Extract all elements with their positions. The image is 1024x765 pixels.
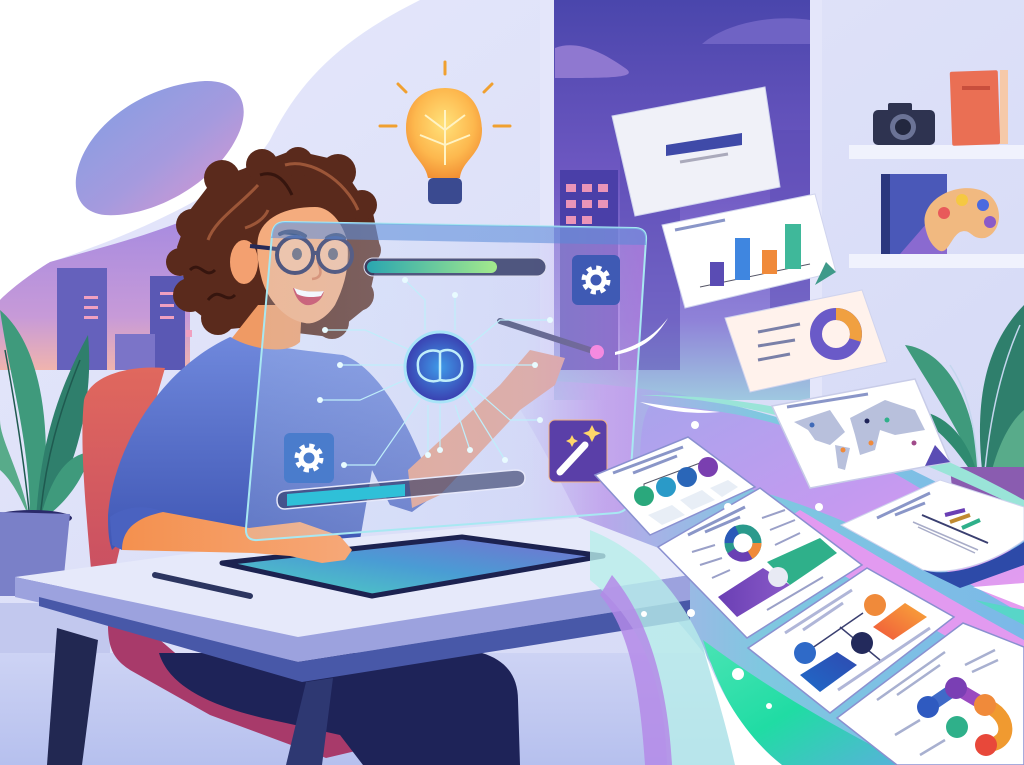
person <box>108 147 590 765</box>
card: title slide <box>612 87 780 216</box>
ear <box>230 240 258 284</box>
glasses <box>250 237 352 273</box>
desk <box>15 518 690 765</box>
bottom progress bar <box>277 470 525 509</box>
icon: magic wand <box>549 420 607 482</box>
card: process path <box>837 623 1024 765</box>
card: bar chart <box>662 194 836 308</box>
icon: palette <box>925 188 999 251</box>
face <box>257 207 348 323</box>
neural circuit lines <box>320 280 550 465</box>
card: world map <box>772 379 950 488</box>
nose <box>312 262 320 279</box>
left city skyline <box>0 218 192 370</box>
eyes <box>292 248 338 260</box>
circuit nodes <box>317 277 553 468</box>
shelves with camera, book, palette <box>849 70 1024 268</box>
forearm with pen <box>408 350 565 508</box>
card: flow diagram <box>595 437 755 535</box>
icon: camera <box>873 103 935 145</box>
window with city view <box>540 0 822 400</box>
white wedge <box>703 647 782 765</box>
trousers <box>159 653 520 765</box>
hair dark curls <box>190 174 292 300</box>
eyebrows <box>280 232 344 238</box>
icon: gear top <box>572 255 620 305</box>
color streams behind the cards <box>500 380 1024 765</box>
card: report <box>841 480 1024 588</box>
icon: stylus <box>500 321 590 350</box>
hair highlights <box>208 164 358 240</box>
neck <box>232 305 302 350</box>
sleeve cuff <box>110 507 163 550</box>
card: hierarchy <box>748 568 954 713</box>
sparkles and streaks <box>590 318 823 709</box>
holographic glass screen <box>246 222 646 540</box>
potted plant right <box>903 305 1024 520</box>
icon: brain <box>405 332 475 402</box>
decorative purple blob <box>76 81 244 215</box>
potted plant left <box>0 310 90 596</box>
top progress bar <box>364 258 546 276</box>
card: donut chart <box>725 290 887 392</box>
icon: red book <box>950 70 1008 146</box>
sweater body <box>108 337 435 550</box>
chair <box>82 367 360 758</box>
light bulb <box>380 62 510 204</box>
card: cycle diagram <box>658 488 862 638</box>
hair mass <box>166 147 381 339</box>
icon: blue book <box>881 174 947 254</box>
tablet <box>222 537 603 596</box>
purple stream overlay <box>600 575 672 765</box>
smile <box>293 288 324 305</box>
pencil on desk <box>155 575 250 596</box>
pale stream overlay on desk <box>590 530 740 765</box>
icon: gear bottom <box>284 433 334 483</box>
left arm and hand <box>119 512 352 563</box>
